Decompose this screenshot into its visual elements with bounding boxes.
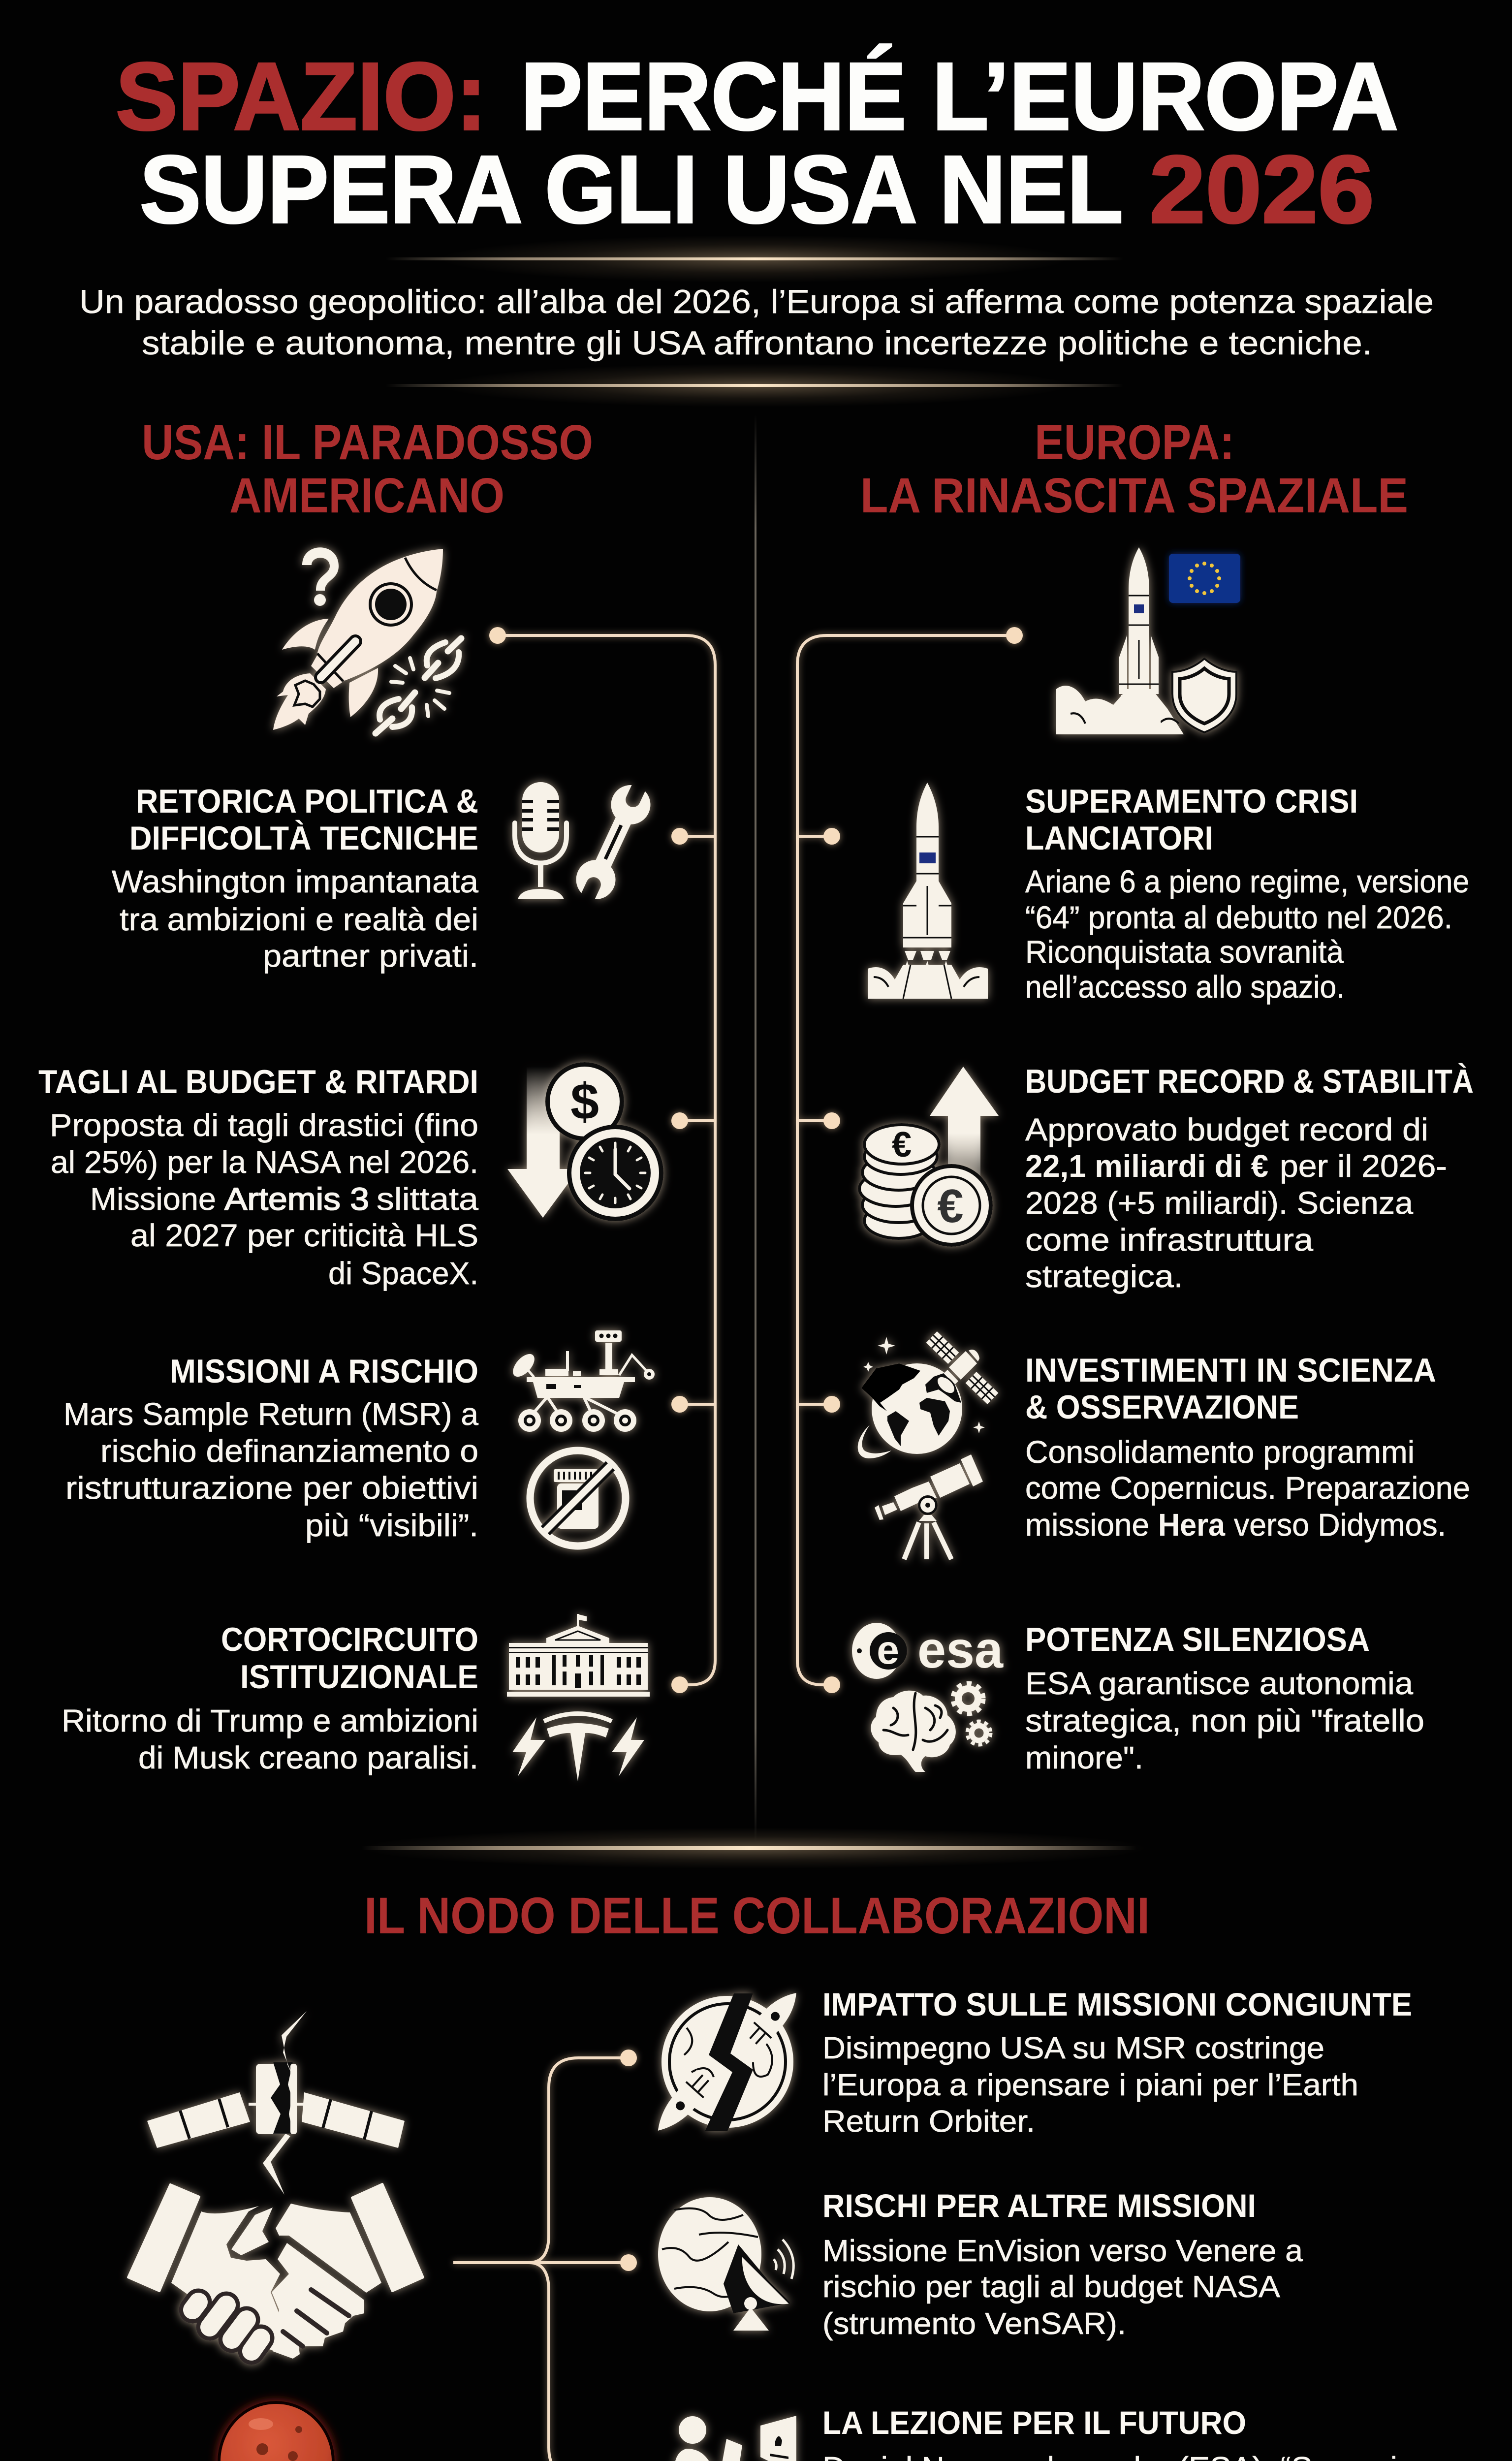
title: SUPERA GLI USA NEL xyxy=(140,136,1123,243)
heading: Europa xyxy=(860,415,1408,523)
heading xyxy=(1025,1352,1436,1426)
icon: microphone and wrench xyxy=(515,780,656,905)
item: tagli al budget xyxy=(38,1062,663,1291)
icon: broken rocket xyxy=(273,547,461,733)
body text: Riconquistata sovranità xyxy=(1025,934,1344,970)
heading: POTENZA SILENZIOSA xyxy=(1025,1621,1370,1658)
panel: USA items xyxy=(38,780,663,1781)
item: rischi per altre missioni xyxy=(658,2187,1303,2341)
subtitle: Un paradosso geopolitico: all’alba del 2026, l’Europa si afferma come potenza spaziale xyxy=(79,283,1434,320)
body text xyxy=(1025,864,1469,1005)
body text: Washington impantanata xyxy=(112,864,478,899)
connector: Europa timeline xyxy=(797,627,1023,1693)
body text xyxy=(112,864,478,974)
icon: euro coins and up arrow: € xyxy=(892,1125,912,1165)
body text: nell’accesso allo spazio. xyxy=(1025,969,1345,1005)
subtitle xyxy=(79,283,1434,362)
connector: collaboration brace xyxy=(453,2050,637,2461)
body text xyxy=(1025,1666,1424,1775)
panel: Europa items xyxy=(852,783,1474,1775)
heading: RETORICA POLITICA & xyxy=(136,783,478,820)
connector: USA timeline xyxy=(489,627,715,1693)
panel: collaboration items xyxy=(649,1985,1460,2461)
icon: down arrow, dollar and clock xyxy=(507,1062,663,1221)
icon: ESA logo: esa xyxy=(917,1621,1004,1679)
icon: White House xyxy=(507,1614,650,1697)
body text: rischio per tagli al budget NASA xyxy=(822,2270,1281,2304)
heading: RISCHI PER ALTRE MISSIONI xyxy=(822,2187,1256,2224)
body text: di SpaceX. xyxy=(328,1256,478,1291)
body text xyxy=(50,1107,478,1291)
heading: USA: USA: IL PARADOSSO xyxy=(142,415,593,470)
subtitle: stabile e autonoma, mentre gli USA affrontano incertezze politiche e tecniche. xyxy=(142,324,1372,362)
title: SPAZIO: xyxy=(116,43,487,150)
icon: Ariane 6 launch xyxy=(868,783,988,999)
body text: ristrutturazione per obiettivi xyxy=(65,1470,478,1506)
body text: Ariane 6 a pieno regime, versione xyxy=(1025,864,1469,899)
body text: (strumento VenSAR). xyxy=(822,2307,1126,2341)
icon: euro coins and up arrow xyxy=(859,1067,999,1247)
body text xyxy=(1025,1112,1447,1294)
item: missioni a rischio xyxy=(63,1330,655,1546)
icon: person at table with document xyxy=(660,2416,799,2461)
heading xyxy=(1025,783,1358,857)
icon: broken satellite xyxy=(147,2011,405,2195)
body text: più “visibili”. xyxy=(305,1508,478,1543)
body text xyxy=(1025,1434,1470,1543)
heading: TAGLI AL BUDGET & RITARDI xyxy=(38,1063,478,1101)
icon: Mars rover xyxy=(509,1330,655,1432)
heading: & OSSERVAZIONE xyxy=(1025,1388,1299,1426)
heading: INVESTIMENTI IN SCIENZA xyxy=(1025,1352,1436,1389)
body text: Artemis 3 xyxy=(224,1181,369,1217)
item: budget record xyxy=(859,1063,1474,1294)
item: superamento crisi lanciatori xyxy=(868,783,1469,1005)
body text: 2028 (+5 miliardi). Scienza xyxy=(1025,1185,1413,1221)
icon: down arrow, dollar and clock: $ xyxy=(570,1073,599,1131)
item: impatto sulle missioni xyxy=(649,1985,1412,2139)
body text: Mars Sample Return (MSR) a xyxy=(63,1396,478,1432)
heading: USA xyxy=(142,415,593,523)
icon: EU flag xyxy=(1169,554,1240,603)
heading: Europa: EUROPA: xyxy=(1035,415,1234,470)
heading xyxy=(221,1621,478,1696)
body text: Hera xyxy=(1158,1507,1225,1543)
title xyxy=(116,43,1398,243)
heading: IMPATTO SULLE MISSIONI CONGIUNTE xyxy=(822,1986,1412,2022)
icon: telescope xyxy=(875,1454,983,1559)
body text: Return Orbiter. xyxy=(822,2105,1035,2139)
body text: Approvato budget record di xyxy=(1025,1112,1428,1147)
body text: rischio definanziamento o xyxy=(100,1433,478,1469)
body text: come infrastruttura xyxy=(1025,1222,1313,1258)
icon: broken globe with rockets xyxy=(649,1985,805,2139)
icon: Mars xyxy=(219,2402,333,2461)
icon: Tesla logo and lightning bolts xyxy=(512,1714,644,1781)
icon: prohibited sample jar xyxy=(530,1451,626,1546)
body text: Ritorno di Trump e ambizioni xyxy=(62,1703,478,1738)
body text: Disimpegno USA su MSR costringe xyxy=(822,2031,1324,2065)
body text: 22,1 miliardi di € xyxy=(1025,1148,1268,1184)
heading xyxy=(129,783,478,857)
icon: launcher and shield xyxy=(1056,547,1236,734)
body text: di Musk creano paralisi. xyxy=(138,1740,478,1775)
body text: l’Europa a ripensare i piani per l’Earth xyxy=(822,2068,1358,2102)
body text: al 25%) per la NASA nel 2026. xyxy=(51,1144,478,1180)
heading: MISSIONI A RISCHIO xyxy=(170,1353,478,1390)
heading: USA: AMERICANO xyxy=(229,468,504,523)
icon: brain and gears xyxy=(871,1683,991,1772)
icon: euro coins and up arrow: € xyxy=(937,1180,964,1232)
body text: partner privati. xyxy=(263,938,478,974)
body text xyxy=(62,1703,478,1775)
icon: Ariane rocket, shield and EU flag xyxy=(1056,547,1240,734)
icon: Earth and satellite xyxy=(858,1331,998,1458)
item: potenza silenziosa xyxy=(852,1621,1424,1775)
heading: ISTITUZIONALE xyxy=(240,1658,478,1696)
body text: strategica, non più "fratello xyxy=(1025,1703,1424,1738)
body text: Consolidamento programmi xyxy=(1025,1434,1415,1470)
body text: strategica. xyxy=(1025,1259,1183,1294)
body text: “64” pronta al debutto nel 2026. xyxy=(1025,900,1452,935)
heading: LA LEZIONE PER IL FUTURO xyxy=(822,2404,1246,2441)
icon: ESA logo xyxy=(852,1621,1004,1679)
item: cortocircuito istituzionale xyxy=(62,1614,650,1781)
item: la lezione per il futuro xyxy=(660,2404,1460,2461)
body text: slittata xyxy=(377,1181,478,1217)
heading: DIFFICOLTÀ TECNICHE xyxy=(129,820,478,857)
body text xyxy=(63,1396,478,1543)
body text: Proposta di tagli drastici (fino xyxy=(50,1107,478,1143)
body text: per il 2026- xyxy=(1280,1148,1447,1184)
body text: ESA garantisce autonomia xyxy=(1025,1666,1413,1701)
title: 2026 xyxy=(1149,136,1374,243)
body text xyxy=(822,2031,1358,2139)
body text xyxy=(822,2234,1303,2341)
heading: SUPERAMENTO CRISI xyxy=(1025,783,1358,820)
body text: Missione xyxy=(90,1181,216,1217)
heading: Europa: LA RINASCITA SPAZIALE xyxy=(860,468,1408,523)
heading: il nodo delle collaborazioni: IL NODO DELLE COLLABORAZIONI xyxy=(364,1887,1150,1945)
body text: come Copernicus. Preparazione xyxy=(1025,1470,1470,1506)
body text: Missione EnVision verso Venere a xyxy=(822,2234,1303,2268)
body text: al 2027 per criticità HLS xyxy=(130,1218,478,1253)
icon: ESA logo: e xyxy=(877,1628,899,1672)
icon: broken handshake xyxy=(128,2184,423,2359)
body text: missione xyxy=(1025,1507,1149,1543)
body text: tra ambizioni e realtà dei xyxy=(120,902,478,937)
heading: CORTOCIRCUITO xyxy=(221,1621,478,1658)
body text: minore". xyxy=(1025,1740,1143,1775)
heading: LANCIATORI xyxy=(1025,820,1213,857)
title: PERCHÉ L’EUROPA xyxy=(521,43,1398,150)
icon: Venus and radar dish xyxy=(658,2197,793,2331)
item: retorica politica xyxy=(112,780,656,974)
item: investimenti in scienza xyxy=(858,1331,1470,1559)
body text: verso Didymos. xyxy=(1234,1507,1446,1543)
